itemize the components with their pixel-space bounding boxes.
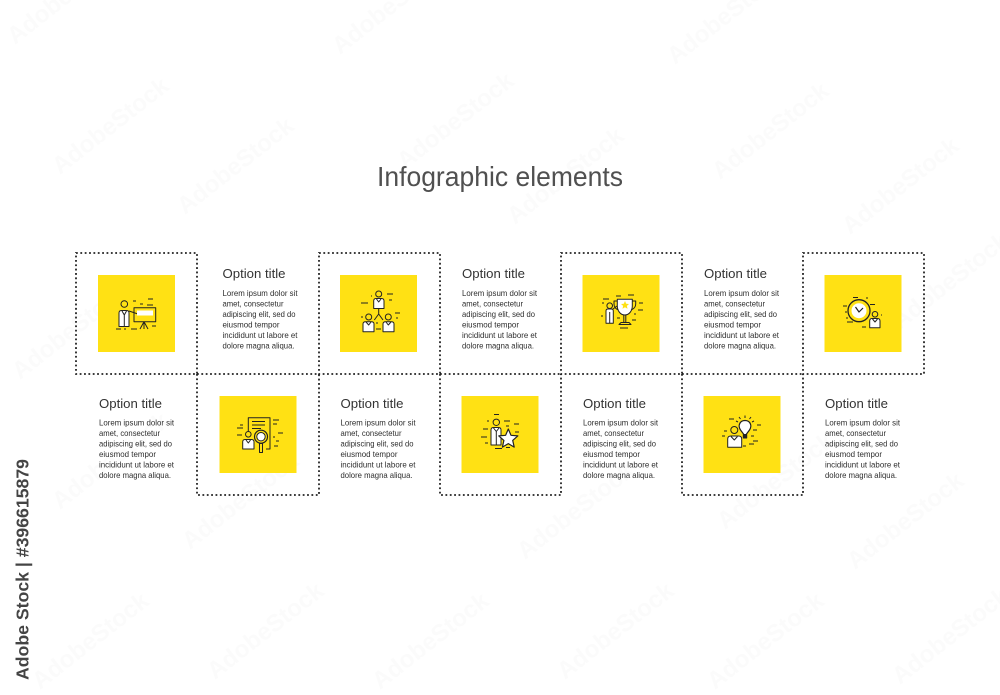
text: AdobeStock [27, 587, 155, 695]
panel: step 5 text: eiusmod tempor [704, 320, 761, 330]
panel: step 6 text: amet, consectetur [583, 428, 644, 438]
panel: step 1 icon tile [98, 275, 175, 352]
text: AdobeStock [837, 132, 965, 240]
panel: step 3 text: Option title [462, 266, 525, 281]
text: AdobeStock [707, 77, 835, 185]
panel: step 1 text: eiusmod tempor [222, 320, 280, 330]
panel: step 1 text: Option title [222, 266, 286, 281]
panel: step 4 text: incididunt ut labore et [340, 460, 416, 470]
icon: team hierarchy [361, 291, 400, 332]
panel: step 4 text: adipiscing elit, sed do [340, 438, 414, 448]
panel: step 5 text: Lorem ipsum dolor sit [704, 288, 780, 298]
title: Infographic elements [377, 161, 623, 192]
dotted grid frame [76, 253, 924, 495]
panel: step 3 text: incididunt ut labore et [462, 330, 538, 340]
text: AdobeStock [702, 587, 830, 695]
panel: step 7 text: amet, consectetur [825, 428, 886, 438]
panel: step 1 text: dolore magna aliqua. [222, 340, 294, 350]
panel: step 6 text: adipiscing elit, sed do [583, 438, 656, 448]
panel: step 2 text: eiusmod tempor [99, 449, 156, 459]
text: AdobeStock [367, 587, 495, 695]
panel: step 5 text: incididunt ut labore et [704, 330, 780, 340]
text: AdobeStock [552, 577, 680, 685]
icon: person with light bulb [722, 416, 761, 447]
text: AdobeStock [177, 447, 305, 555]
panel: step 1 text: Lorem ipsum dolor sit [222, 288, 298, 298]
panel: step 3 text: amet, consectetur [462, 298, 523, 308]
panel: step 4 text: Lorem ipsum dolor sit [340, 418, 416, 428]
panel: step 2 text: Option title [99, 396, 162, 411]
panel: step 2 text: amet, consectetur [99, 428, 160, 438]
panel: step 3 text: Lorem ipsum dolor sit [462, 288, 538, 298]
stock id label: Adobe Stock | #396615879 [12, 459, 32, 680]
panel: step 3 text: adipiscing elit, sed do [462, 309, 535, 319]
panel: step 6 text: Lorem ipsum dolor sit [583, 418, 659, 428]
panel: step 2 text: dolore magna aliqua. [99, 470, 171, 480]
panel: step 7 text: incididunt ut labore et [825, 460, 901, 470]
text: AdobeStock [172, 112, 300, 220]
text: AdobeStock [712, 427, 840, 535]
text: AdobeStock [842, 467, 970, 575]
panel: step 7 icon tile [824, 275, 902, 352]
text: AdobeStock [7, 277, 135, 385]
panel: step 7 text: eiusmod tempor [825, 449, 882, 459]
panel: step 4 text: amet, consectetur [340, 428, 402, 438]
panel: step 3 icon tile [340, 275, 417, 352]
icon: document with magnifier and person [237, 418, 283, 452]
text: AdobeStock [47, 72, 175, 180]
panel: step 4 text: Option title [340, 396, 404, 411]
panel: step 6 text [583, 396, 659, 480]
panel: step 1 text: amet, consectetur [222, 298, 284, 308]
panel: step 2 text: Lorem ipsum dolor sit [99, 418, 175, 428]
panel: step 4 text [340, 396, 416, 480]
panel: step 6 text: Option title [583, 396, 646, 411]
panel: step 7 text [825, 396, 901, 480]
icon: person with star [481, 414, 519, 448]
text: AdobeStock [47, 407, 175, 515]
text: AdobeStock [202, 577, 330, 685]
icon: trophy with person [601, 295, 643, 328]
panel: step 5 text: dolore magna aliqua. [704, 340, 776, 350]
panel: step 2 text: adipiscing elit, sed do [99, 438, 172, 448]
panel: step 4 text: eiusmod tempor [340, 449, 398, 459]
panel: step 7 text: dolore magna aliqua. [825, 470, 897, 480]
panel: step 4 icon tile [462, 396, 538, 473]
panel: step 1 text [222, 266, 298, 350]
panel: step 1 text: adipiscing elit, sed do [222, 309, 296, 319]
panel: step 3 text: dolore magna aliqua. [462, 340, 534, 350]
panel: step 5 text: amet, consectetur [704, 298, 765, 308]
panel: step 7 text: Lorem ipsum dolor sit [825, 418, 901, 428]
panel: step 7 text: adipiscing elit, sed do [825, 438, 898, 448]
panel: step 6 icon tile [704, 396, 780, 473]
panel: step 6 text: incididunt ut labore et [583, 460, 659, 470]
panel: step 2 text [99, 396, 175, 480]
panel: step 5 icon tile [582, 275, 660, 352]
text: AdobeStock [502, 122, 630, 230]
icon: presenter at board [116, 299, 156, 329]
panel: step 5 text: adipiscing elit, sed do [704, 309, 777, 319]
panel: step 5 text: Option title [704, 266, 767, 281]
icon: clock with person [843, 298, 882, 328]
text: AdobeStock [392, 67, 520, 175]
panel: step 1 text: incididunt ut labore et [222, 330, 298, 340]
panel: step 6 text: eiusmod tempor [583, 449, 640, 459]
panel: step 5 text [704, 266, 780, 350]
panel: step 7 text: Option title [825, 396, 888, 411]
panel: step 2 icon tile [220, 396, 296, 473]
panel: step 4 text: dolore magna aliqua. [340, 470, 412, 480]
panel: step 6 text: dolore magna aliqua. [583, 470, 655, 480]
panel: step 3 text: eiusmod tempor [462, 320, 519, 330]
panel: step 2 text: incididunt ut labore et [99, 460, 175, 470]
text: AdobeStock [512, 457, 640, 565]
panel: step 3 text [462, 266, 538, 350]
